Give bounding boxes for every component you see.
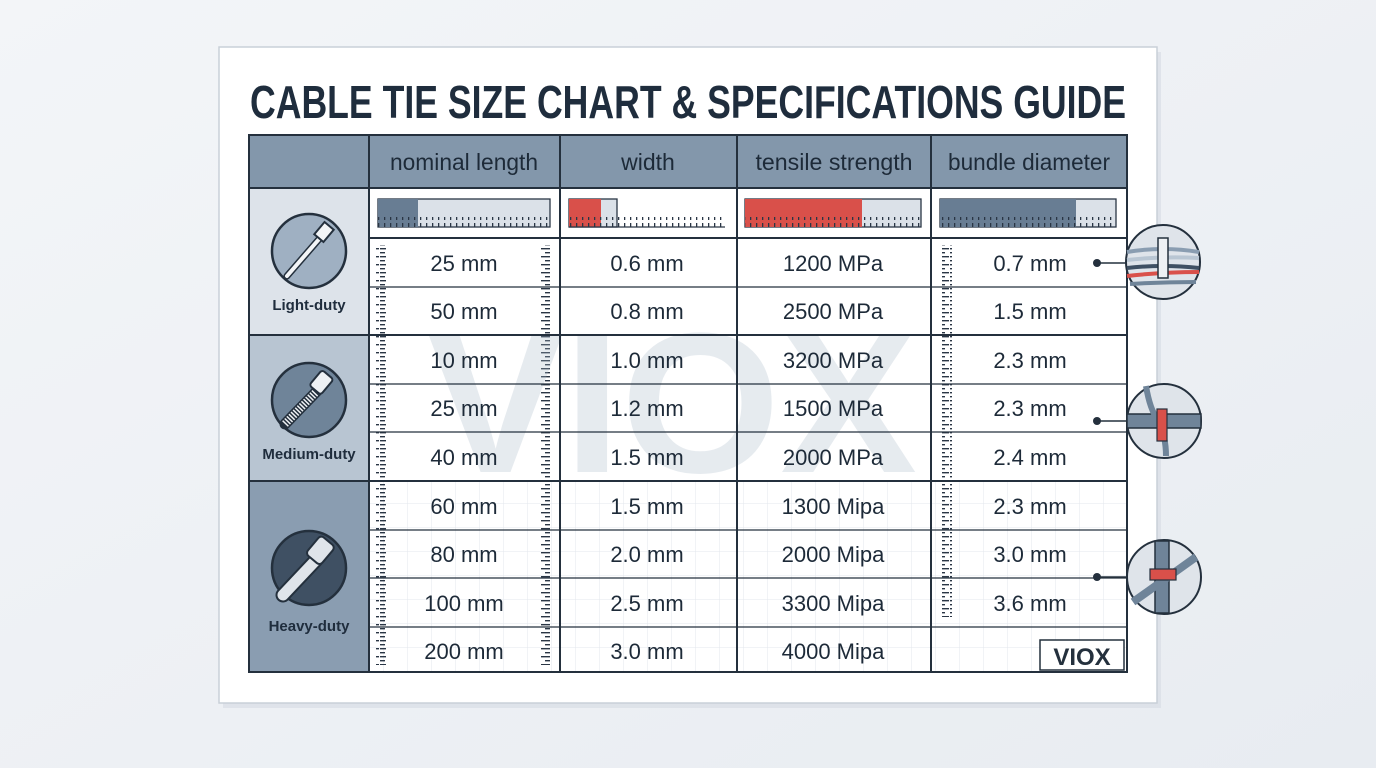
data: bundle diameter: 2.4 mm <box>993 445 1067 470</box>
callout: bundled cables <box>1093 225 1200 299</box>
grid lines <box>249 135 1127 672</box>
data: nominal length: 40 mm <box>430 445 498 470</box>
VIOX logo box <box>1040 640 1124 671</box>
data: width: 1.5 mm <box>610 494 684 519</box>
header row <box>249 135 1127 188</box>
header row: width <box>620 149 675 175</box>
data: bundle diameter: 2.3 mm <box>993 494 1067 519</box>
header row: nominal length <box>390 149 538 175</box>
data: width <box>610 251 684 664</box>
data: nominal length: 60 mm <box>430 494 498 519</box>
data: bundle diameter <box>993 251 1067 616</box>
data: width: 1.5 mm <box>610 445 684 470</box>
data: nominal length: 200 mm <box>424 639 504 664</box>
table <box>249 135 1127 672</box>
category: heavy-duty <box>249 481 369 672</box>
category: medium-duty: Medium-duty <box>262 446 356 463</box>
VIOX logo box: VIOX <box>1053 644 1111 671</box>
callout: heavy junction <box>1093 540 1201 614</box>
data: nominal length: 25 mm <box>430 396 498 421</box>
category: medium-duty <box>249 335 369 481</box>
data: width: 0.6 mm <box>610 251 684 276</box>
data: tensile strength: 2000 Mipa <box>782 542 885 567</box>
callout: cable crossing <box>1093 384 1201 458</box>
scale bars row <box>378 199 1116 227</box>
data: nominal length: 50 mm <box>430 299 498 324</box>
data: width: 0.8 mm <box>610 299 684 324</box>
data: bundle diameter: 3.6 mm <box>993 591 1067 616</box>
data: nominal length: 80 mm <box>430 542 498 567</box>
data: width: 2.0 mm <box>610 542 684 567</box>
data: tensile strength: 2000 MPa <box>783 445 884 470</box>
data: tensile strength: 3300 Mipa <box>782 591 885 616</box>
data: bundle diameter: 0.7 mm <box>993 251 1067 276</box>
data: nominal length: 100 mm <box>424 591 504 616</box>
watermark: VIOX <box>427 292 917 515</box>
data: tensile strength: 2500 MPa <box>783 299 884 324</box>
data: width: 1.0 mm <box>610 348 684 373</box>
data: tensile strength: 4000 Mipa <box>782 639 885 664</box>
data: bundle diameter: 2.3 mm <box>993 396 1067 421</box>
data: width: 3.0 mm <box>610 639 684 664</box>
data: tensile strength: 3200 MPa <box>783 348 884 373</box>
category: light-duty <box>249 188 369 335</box>
header row: tensile strength <box>756 149 912 175</box>
data: bundle diameter: 3.0 mm <box>993 542 1067 567</box>
data: nominal length: 10 mm <box>430 348 498 373</box>
side rulers <box>376 245 952 665</box>
category: light-duty: Light-duty <box>272 297 346 314</box>
data: tensile strength: 1500 MPa <box>783 396 884 421</box>
data: bundle diameter: 1.5 mm <box>993 299 1067 324</box>
header row: bundle diameter <box>948 149 1110 175</box>
category: heavy-duty: Heavy-duty <box>269 618 350 635</box>
data: tensile strength <box>782 251 885 664</box>
data: width: 2.5 mm <box>610 591 684 616</box>
data: bundle diameter: 2.3 mm <box>993 348 1067 373</box>
data: tensile strength: 1300 Mipa <box>782 494 885 519</box>
data: nominal length <box>424 251 504 664</box>
data: tensile strength: 1200 MPa <box>783 251 884 276</box>
card <box>219 47 1161 708</box>
title: CABLE TIE SIZE CHART & SPECIFICATIONS GUIDE <box>250 76 1126 128</box>
data: width: 1.2 mm <box>610 396 684 421</box>
data: nominal length: 25 mm <box>430 251 498 276</box>
